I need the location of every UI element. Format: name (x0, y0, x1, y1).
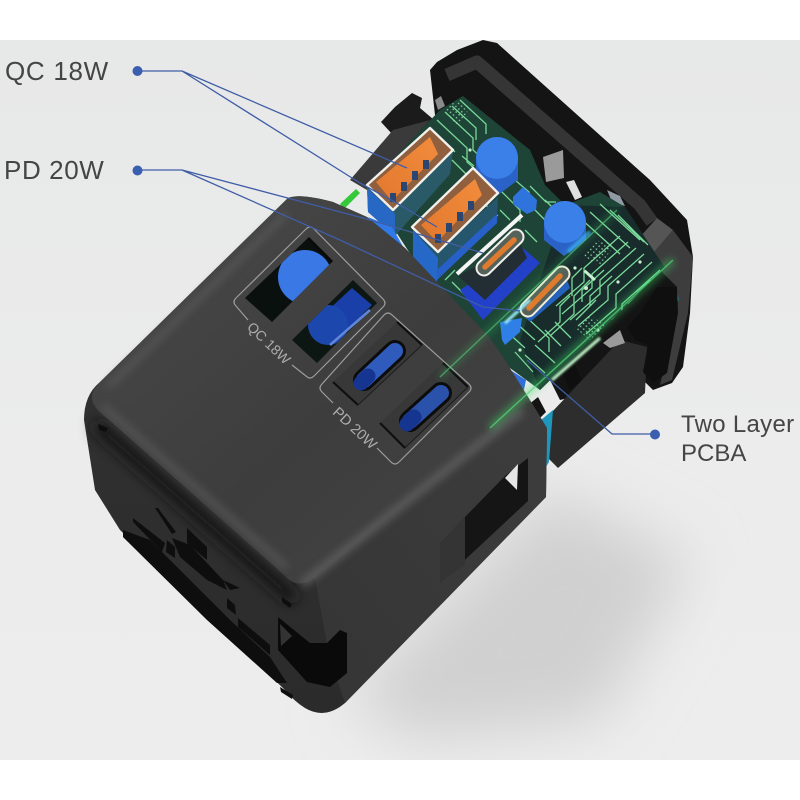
PCBA text: Two Layer (681, 411, 794, 438)
USB-A port 2 (412, 168, 498, 252)
PD outline (320, 313, 471, 464)
USB-C 2 blue base (500, 318, 522, 345)
right side face window (440, 458, 528, 583)
QC outline (234, 227, 385, 378)
leader lines (137, 71, 655, 434)
dotted PCB pads (445, 100, 615, 340)
QC 18W callout (5, 56, 142, 86)
PD 20W text: PD 20W (4, 155, 104, 185)
circuit board (367, 96, 665, 390)
USB-A 2 base (413, 197, 498, 280)
right side face (315, 400, 547, 703)
QC 18W text: QC 18W (5, 56, 109, 86)
housing inner rim (447, 62, 652, 222)
PD 20W leader (137, 170, 520, 311)
PCBA dot (650, 430, 660, 440)
PCBA leader (527, 360, 655, 434)
PD 20W dot (132, 166, 142, 176)
green edge sliver (340, 189, 360, 209)
corner plug hole (278, 617, 347, 687)
body back wedge (350, 120, 430, 190)
blue port housings (367, 150, 570, 390)
rear housing with PCB (340, 40, 693, 400)
PD 20W callout (4, 155, 142, 185)
icon: capacitor 1 (476, 137, 518, 198)
socket connectors (627, 287, 678, 383)
USB-C 1 body (458, 243, 527, 300)
icon: capacitor 2 (544, 201, 586, 256)
edge shading (100, 428, 290, 596)
blue component block (513, 187, 537, 214)
USB-A 1 side wall (367, 150, 453, 236)
PD slot 2 (380, 363, 468, 448)
green scan lines (440, 210, 673, 428)
body silhouette (84, 196, 547, 713)
PD label: PD 20W (329, 404, 380, 453)
top surface (92, 196, 530, 584)
USB-C port 1 (484, 237, 516, 268)
QC 18W dot (132, 66, 142, 76)
QC label: QC 18W (244, 319, 294, 368)
white board bar (457, 215, 522, 274)
lower plug block (528, 287, 678, 470)
PCBA text: PCBA (681, 440, 746, 467)
bright PCB highlights (463, 148, 642, 352)
front face plug slots (98, 424, 293, 699)
QC slot 2 (292, 280, 377, 363)
housing gap details (435, 96, 693, 385)
device shadow (345, 490, 690, 740)
Two Layer PCBA callout (650, 411, 794, 467)
edge highlights (105, 215, 520, 582)
USB-C port 2 (528, 274, 562, 309)
PD 20W port group (320, 313, 471, 464)
QC slot 1 (245, 238, 332, 322)
QC 18W port group (234, 227, 385, 378)
USB-A port 1 (367, 128, 453, 210)
board dark zone (520, 205, 665, 390)
charger body (84, 196, 547, 713)
plug prong top (381, 93, 440, 165)
housing shell (430, 40, 693, 400)
circuit traces (429, 100, 660, 373)
blue wedge (368, 217, 405, 250)
blue plate (460, 248, 540, 320)
QC 18W leader (137, 71, 437, 227)
PD slot 1 (333, 322, 422, 405)
